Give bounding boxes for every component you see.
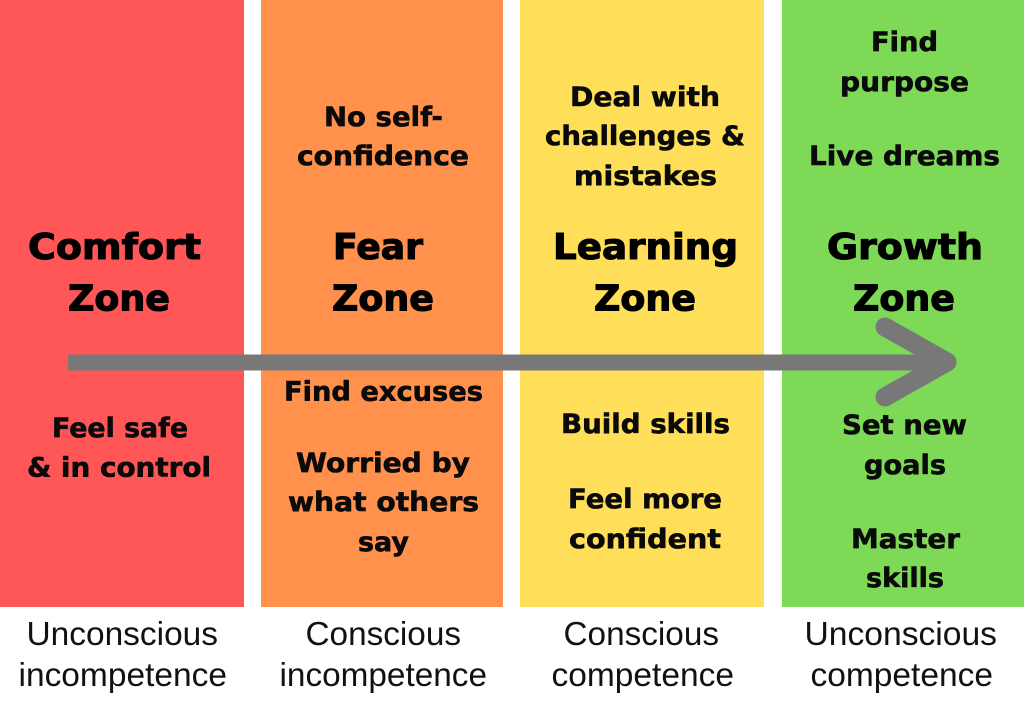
- text: no self-confidence: No self-: [324, 102, 443, 133]
- text: find purpose: [840, 27, 969, 98]
- text: deal with challenges and mistakes: [545, 82, 745, 192]
- text: find excuses: Find excuses: [284, 376, 483, 408]
- text: build skills: Build skills: [561, 409, 730, 440]
- heading: growth zone: Zone: [853, 278, 955, 320]
- text: worried by what others say: say: [358, 527, 409, 558]
- text: master skills: [851, 524, 961, 594]
- label: conscious competence: Conscious: [564, 615, 719, 652]
- text: no self-confidence: [297, 102, 469, 172]
- text: find purpose: Find: [871, 27, 938, 58]
- label: unconscious incompetence: Unconscious: [26, 615, 218, 652]
- text: deal with challenges and mistakes: challenges &: [545, 121, 745, 152]
- text: master skills: skills: [866, 563, 944, 594]
- heading: growth zone: Growth: [827, 227, 983, 268]
- text: master skills: Master: [851, 524, 961, 555]
- panel: growth zone: [782, 0, 1024, 607]
- label: unconscious incompetence: [18, 615, 227, 693]
- label: conscious incompetence: incompetence: [280, 656, 487, 693]
- panel: learning zone: [520, 0, 764, 607]
- heading: growth zone: [827, 227, 983, 320]
- heading: learning zone: Zone: [594, 278, 696, 320]
- heading: fear zone: Zone: [332, 278, 434, 320]
- heading: comfort zone: Comfort: [28, 227, 201, 268]
- heading: learning zone: Learning: [553, 227, 738, 268]
- text: feel more confident: [568, 484, 722, 555]
- text: deal with challenges and mistakes: Deal with: [570, 82, 720, 113]
- heading: learning zone: [553, 227, 738, 320]
- label: unconscious competence: Unconscious: [804, 615, 997, 652]
- label: conscious competence: [552, 615, 734, 693]
- text: set new goals: [842, 410, 967, 481]
- heading: fear zone: Fear: [333, 227, 423, 268]
- label: unconscious incompetence: incompetence: [18, 656, 227, 693]
- text: live dreams: Live dreams: [809, 141, 1000, 172]
- text: feel safe and in control: [27, 413, 211, 484]
- heading: comfort zone: [28, 227, 201, 320]
- text: set new goals: Set new: [842, 410, 967, 441]
- text: worried by what others say: Worried by: [296, 448, 470, 479]
- panel: comfort zone: [0, 0, 244, 607]
- text: feel more confident: confident: [569, 524, 721, 555]
- text: worried by what others say: [288, 448, 479, 558]
- text: deal with challenges and mistakes: mistakes: [574, 161, 717, 192]
- label: unconscious competence: [804, 615, 997, 693]
- text: feel more confident: Feel more: [568, 484, 722, 515]
- label: conscious competence: competence: [552, 656, 734, 693]
- text: worried by what others say: what others: [288, 487, 479, 518]
- heading: fear zone: [332, 227, 434, 320]
- arrow: progression from comfort to growth: [68, 327, 947, 397]
- label: conscious incompetence: Conscious: [306, 615, 461, 652]
- text: feel safe and in control: & in control: [27, 452, 211, 484]
- text: feel safe and in control: Feel safe: [52, 413, 188, 444]
- text: set new goals: goals: [864, 450, 946, 481]
- label: unconscious competence: competence: [810, 656, 993, 693]
- label: conscious incompetence: [280, 615, 487, 693]
- text: find purpose: purpose: [840, 67, 969, 98]
- heading: comfort zone: Zone: [68, 278, 170, 320]
- panel: fear zone: [261, 0, 503, 607]
- text: no self-confidence: confidence: [297, 141, 469, 172]
